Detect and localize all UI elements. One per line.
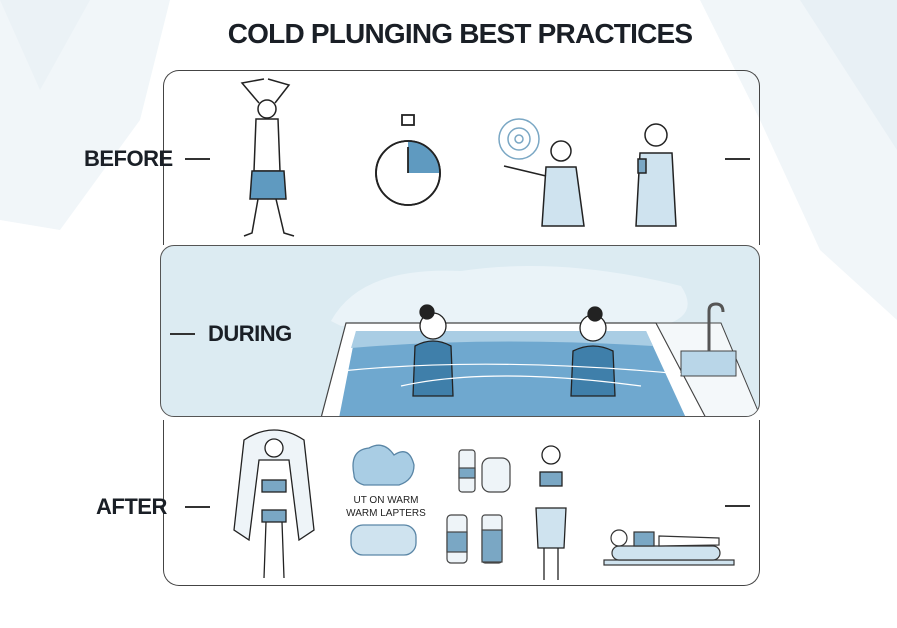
- label: during: DURING: [208, 321, 292, 346]
- label: after: AFTER: [96, 494, 167, 519]
- icon: person with drink: [636, 124, 676, 226]
- panel: after: WARM LAPTERS: [346, 508, 426, 519]
- label: before: BEFORE: [84, 146, 173, 171]
- icon: stopwatch: [376, 115, 440, 205]
- title: COLD PLUNGING BEST PRACTICES: [228, 18, 692, 49]
- spray: [331, 266, 688, 326]
- panel: after: [163, 420, 760, 586]
- icon: pool: [321, 304, 761, 418]
- icon: person with towel: [234, 430, 314, 578]
- icon: stretching person: [242, 79, 294, 236]
- panel: during: [160, 245, 760, 417]
- icon: swimmers: [413, 305, 615, 396]
- icon: person with spiral: [499, 119, 584, 226]
- panel: before: [163, 70, 760, 245]
- text: warm layers: UT ON WARM: [354, 495, 418, 506]
- icon: bottles: [447, 450, 510, 563]
- icon: lying person: [604, 530, 734, 565]
- icon: warm layers: [351, 445, 416, 555]
- icon: standing person: [536, 446, 566, 580]
